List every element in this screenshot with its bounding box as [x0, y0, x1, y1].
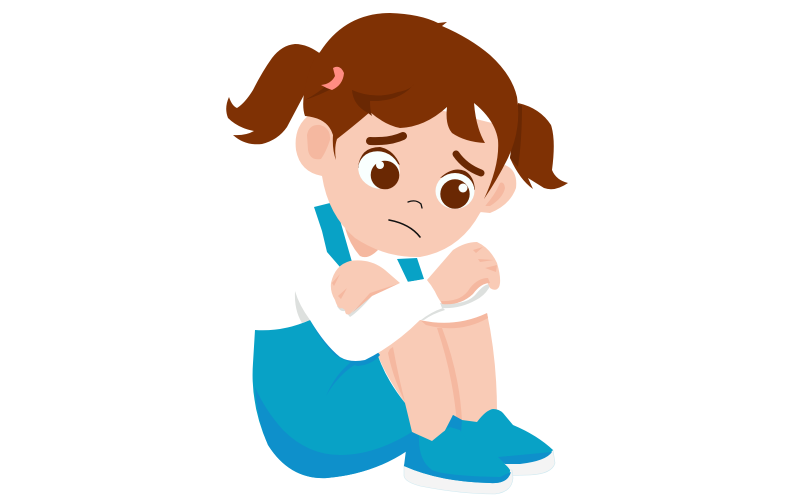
ear: left inner ear [307, 125, 330, 159]
eyebrow: right [456, 154, 481, 173]
neck shadow [345, 228, 378, 257]
hair tie [321, 67, 344, 90]
strap: left dress strap [314, 203, 352, 267]
ear: right ear [480, 165, 516, 213]
hair: top of head and fringe [303, 13, 518, 199]
hair: left ponytail [226, 44, 345, 144]
shoe: back right shoe [440, 409, 555, 476]
face [296, 100, 504, 257]
hand: right hand [427, 242, 500, 308]
cuff: white cuff over hands [395, 279, 441, 320]
eye: right [436, 170, 475, 209]
shoe: front left shoe [404, 427, 513, 494]
hair: right ponytail [510, 103, 568, 189]
eye: left [353, 145, 405, 195]
mouth [389, 220, 420, 237]
strap: right dress strap [397, 258, 424, 282]
skirt: blue dress [253, 318, 412, 478]
shirt: white sleeve and cuffs [295, 262, 490, 361]
hand: left hand [331, 260, 400, 317]
eyebrow: left [370, 136, 403, 141]
nose [408, 201, 422, 208]
legs: bare knees and shins [377, 313, 497, 450]
